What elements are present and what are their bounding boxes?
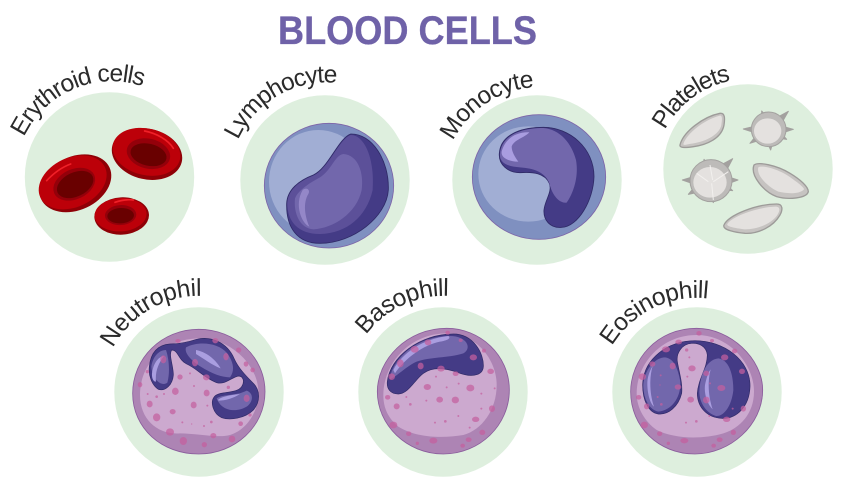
label: erythroid cells: Erythroid cells [10,64,144,136]
lymphocyte cell [264,123,394,248]
basophil cell [377,328,509,454]
background circle [612,307,782,477]
panel: erythroid cells [10,64,194,262]
label: basophil: Basophill [354,278,448,334]
eosinophil cell [631,328,763,454]
title: BLOOD CELLS [278,9,537,53]
label: eosinophil: Eosinophill [599,280,708,344]
label: lymphocyte: Lymphocyte [224,66,336,138]
red blood cells [30,121,187,236]
background circle [663,84,833,254]
label: monocyte: Monocyte [440,74,532,139]
platelet cells [680,111,808,233]
panel: platelets [652,69,833,254]
panel: eosinophil [599,280,782,477]
background circle [240,95,410,265]
label: neutrophil: Neutrophil [100,278,200,346]
panel: neutrophil [100,278,284,477]
background circle [114,307,284,477]
panel: lymphocyte [224,66,410,265]
panel: monocyte [440,74,622,265]
background circle [25,92,194,262]
background circle [452,95,622,265]
background circle [358,307,528,477]
panel: basophil [354,278,528,477]
label: platelets: Platelets [652,69,730,128]
neutrophil cell [133,329,265,454]
monocyte cell [472,115,606,239]
